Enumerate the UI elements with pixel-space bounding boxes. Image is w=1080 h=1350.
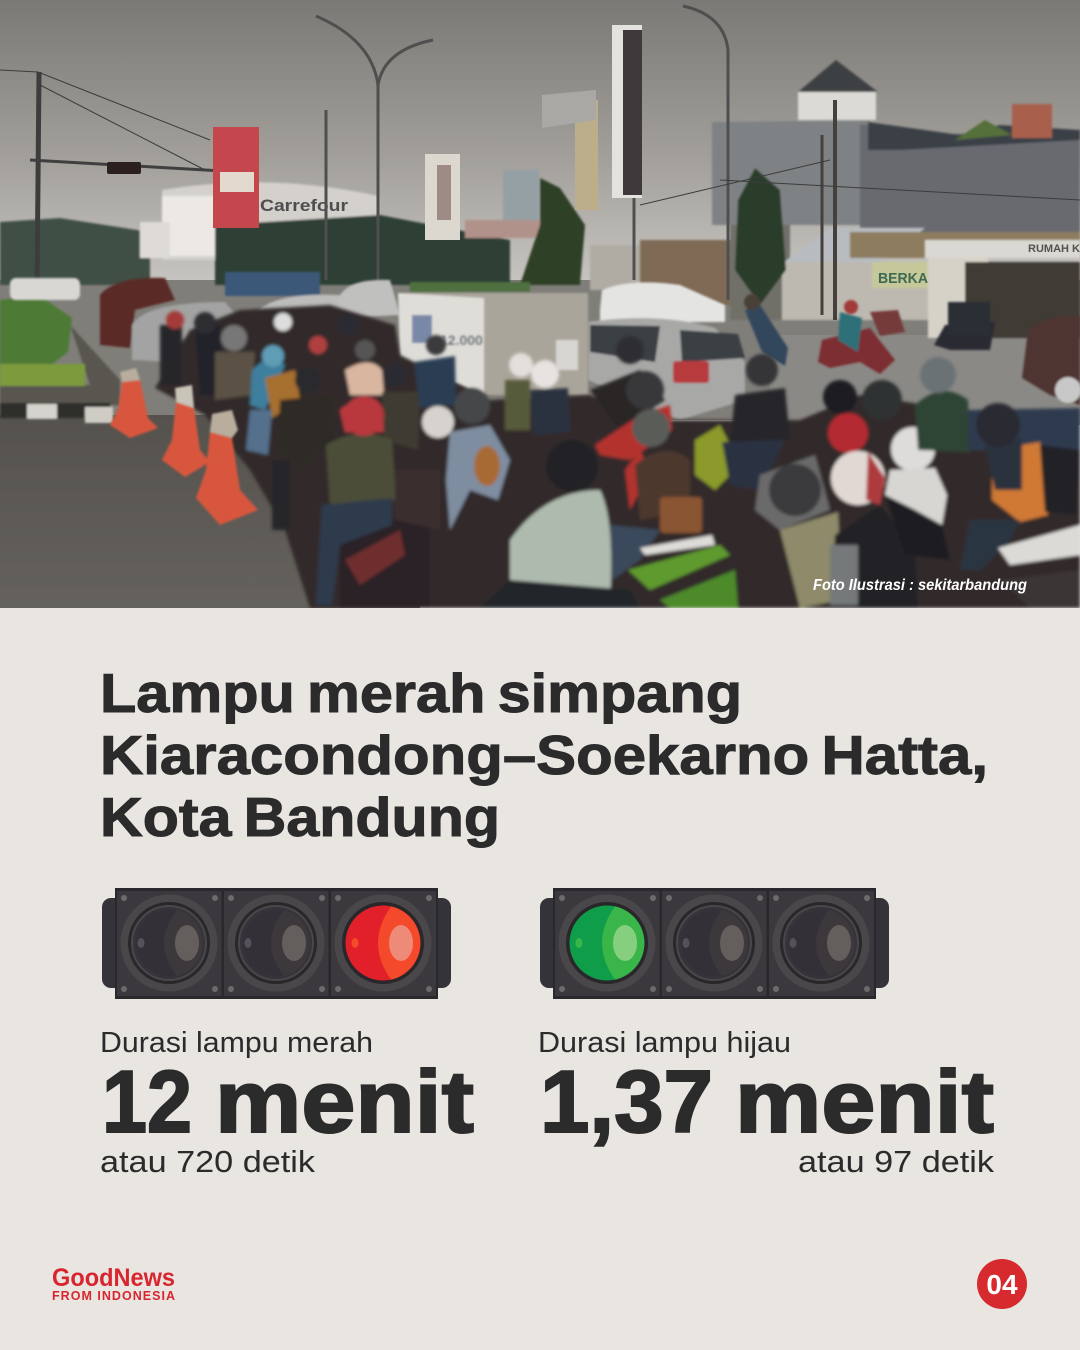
red and white helmets xyxy=(823,380,857,414)
dark blue car xyxy=(968,408,1080,455)
icon: traffic light, green on xyxy=(540,888,889,999)
crowd of motorcycle riders xyxy=(155,305,1080,608)
building signage: Carrefour xyxy=(260,196,348,215)
rider with orange backpack xyxy=(446,425,510,530)
orange road barriers xyxy=(110,368,258,525)
title: Lampu merah simpang xyxy=(100,662,742,724)
billboards xyxy=(213,25,642,240)
green jacket rider xyxy=(915,391,970,452)
building signage xyxy=(260,196,1080,287)
building signage: BERKA xyxy=(878,270,928,287)
stat: green light duration xyxy=(538,1027,995,1179)
patterned rider helmets and back riders xyxy=(755,455,830,530)
street furniture: poles, lamps, traffic signal xyxy=(0,6,1080,320)
stat: red light duration xyxy=(100,1027,474,1179)
red traffic signal box xyxy=(107,162,141,174)
stat: green light duration: atau 97 detik xyxy=(798,1144,995,1179)
stat: red light duration: menit xyxy=(215,1052,474,1151)
stat: green light duration: menit xyxy=(735,1052,994,1151)
page background xyxy=(0,608,1080,1350)
logo: GoodNews from Indonesia: FROM INDONESIA xyxy=(52,1289,175,1303)
sky xyxy=(0,0,1080,290)
stat: green light duration: Durasi lampu hijau xyxy=(538,1027,791,1059)
green motorcycle xyxy=(628,545,730,590)
road surfaces xyxy=(0,280,1080,608)
light jacket rider xyxy=(510,490,611,608)
logo: GoodNews from Indonesia xyxy=(52,1264,175,1303)
logo: GoodNews from Indonesia: GoodNews xyxy=(52,1264,175,1292)
stat: red light duration: Durasi lampu merah xyxy=(100,1027,373,1059)
photo credit: Foto Ilustrasi : sekitarbandung xyxy=(813,577,1028,594)
parked and waiting cars xyxy=(10,272,1080,420)
stat: green light duration: 1,37 xyxy=(540,1052,713,1151)
title: Kiaracondong–Soekarno Hatta, xyxy=(100,724,988,786)
delivery truck box: 12.000 xyxy=(440,332,483,348)
delivery truck box xyxy=(398,282,588,395)
page number badge: 04 xyxy=(986,1269,1018,1300)
photo: motorcycles queuing at the intersection xyxy=(0,0,1080,608)
median with shrub and curb xyxy=(0,296,120,423)
orange jacket rider xyxy=(992,442,1048,522)
white motorcycle fairing xyxy=(998,525,1080,565)
rider on far side with black jacket xyxy=(730,388,790,445)
background trees and buildings xyxy=(0,60,1080,338)
title: Kota Bandung xyxy=(100,786,500,848)
icon: traffic light, red on xyxy=(102,888,451,999)
building signage: RUMAH K xyxy=(1028,243,1080,255)
stat: red light duration: 12 xyxy=(102,1052,192,1151)
stat: red light duration: atau 720 detik xyxy=(100,1144,316,1179)
title xyxy=(100,662,988,848)
page number badge xyxy=(977,1259,1027,1309)
olive jacket rider xyxy=(326,434,396,505)
background motorcycles on the cross road xyxy=(744,294,995,374)
